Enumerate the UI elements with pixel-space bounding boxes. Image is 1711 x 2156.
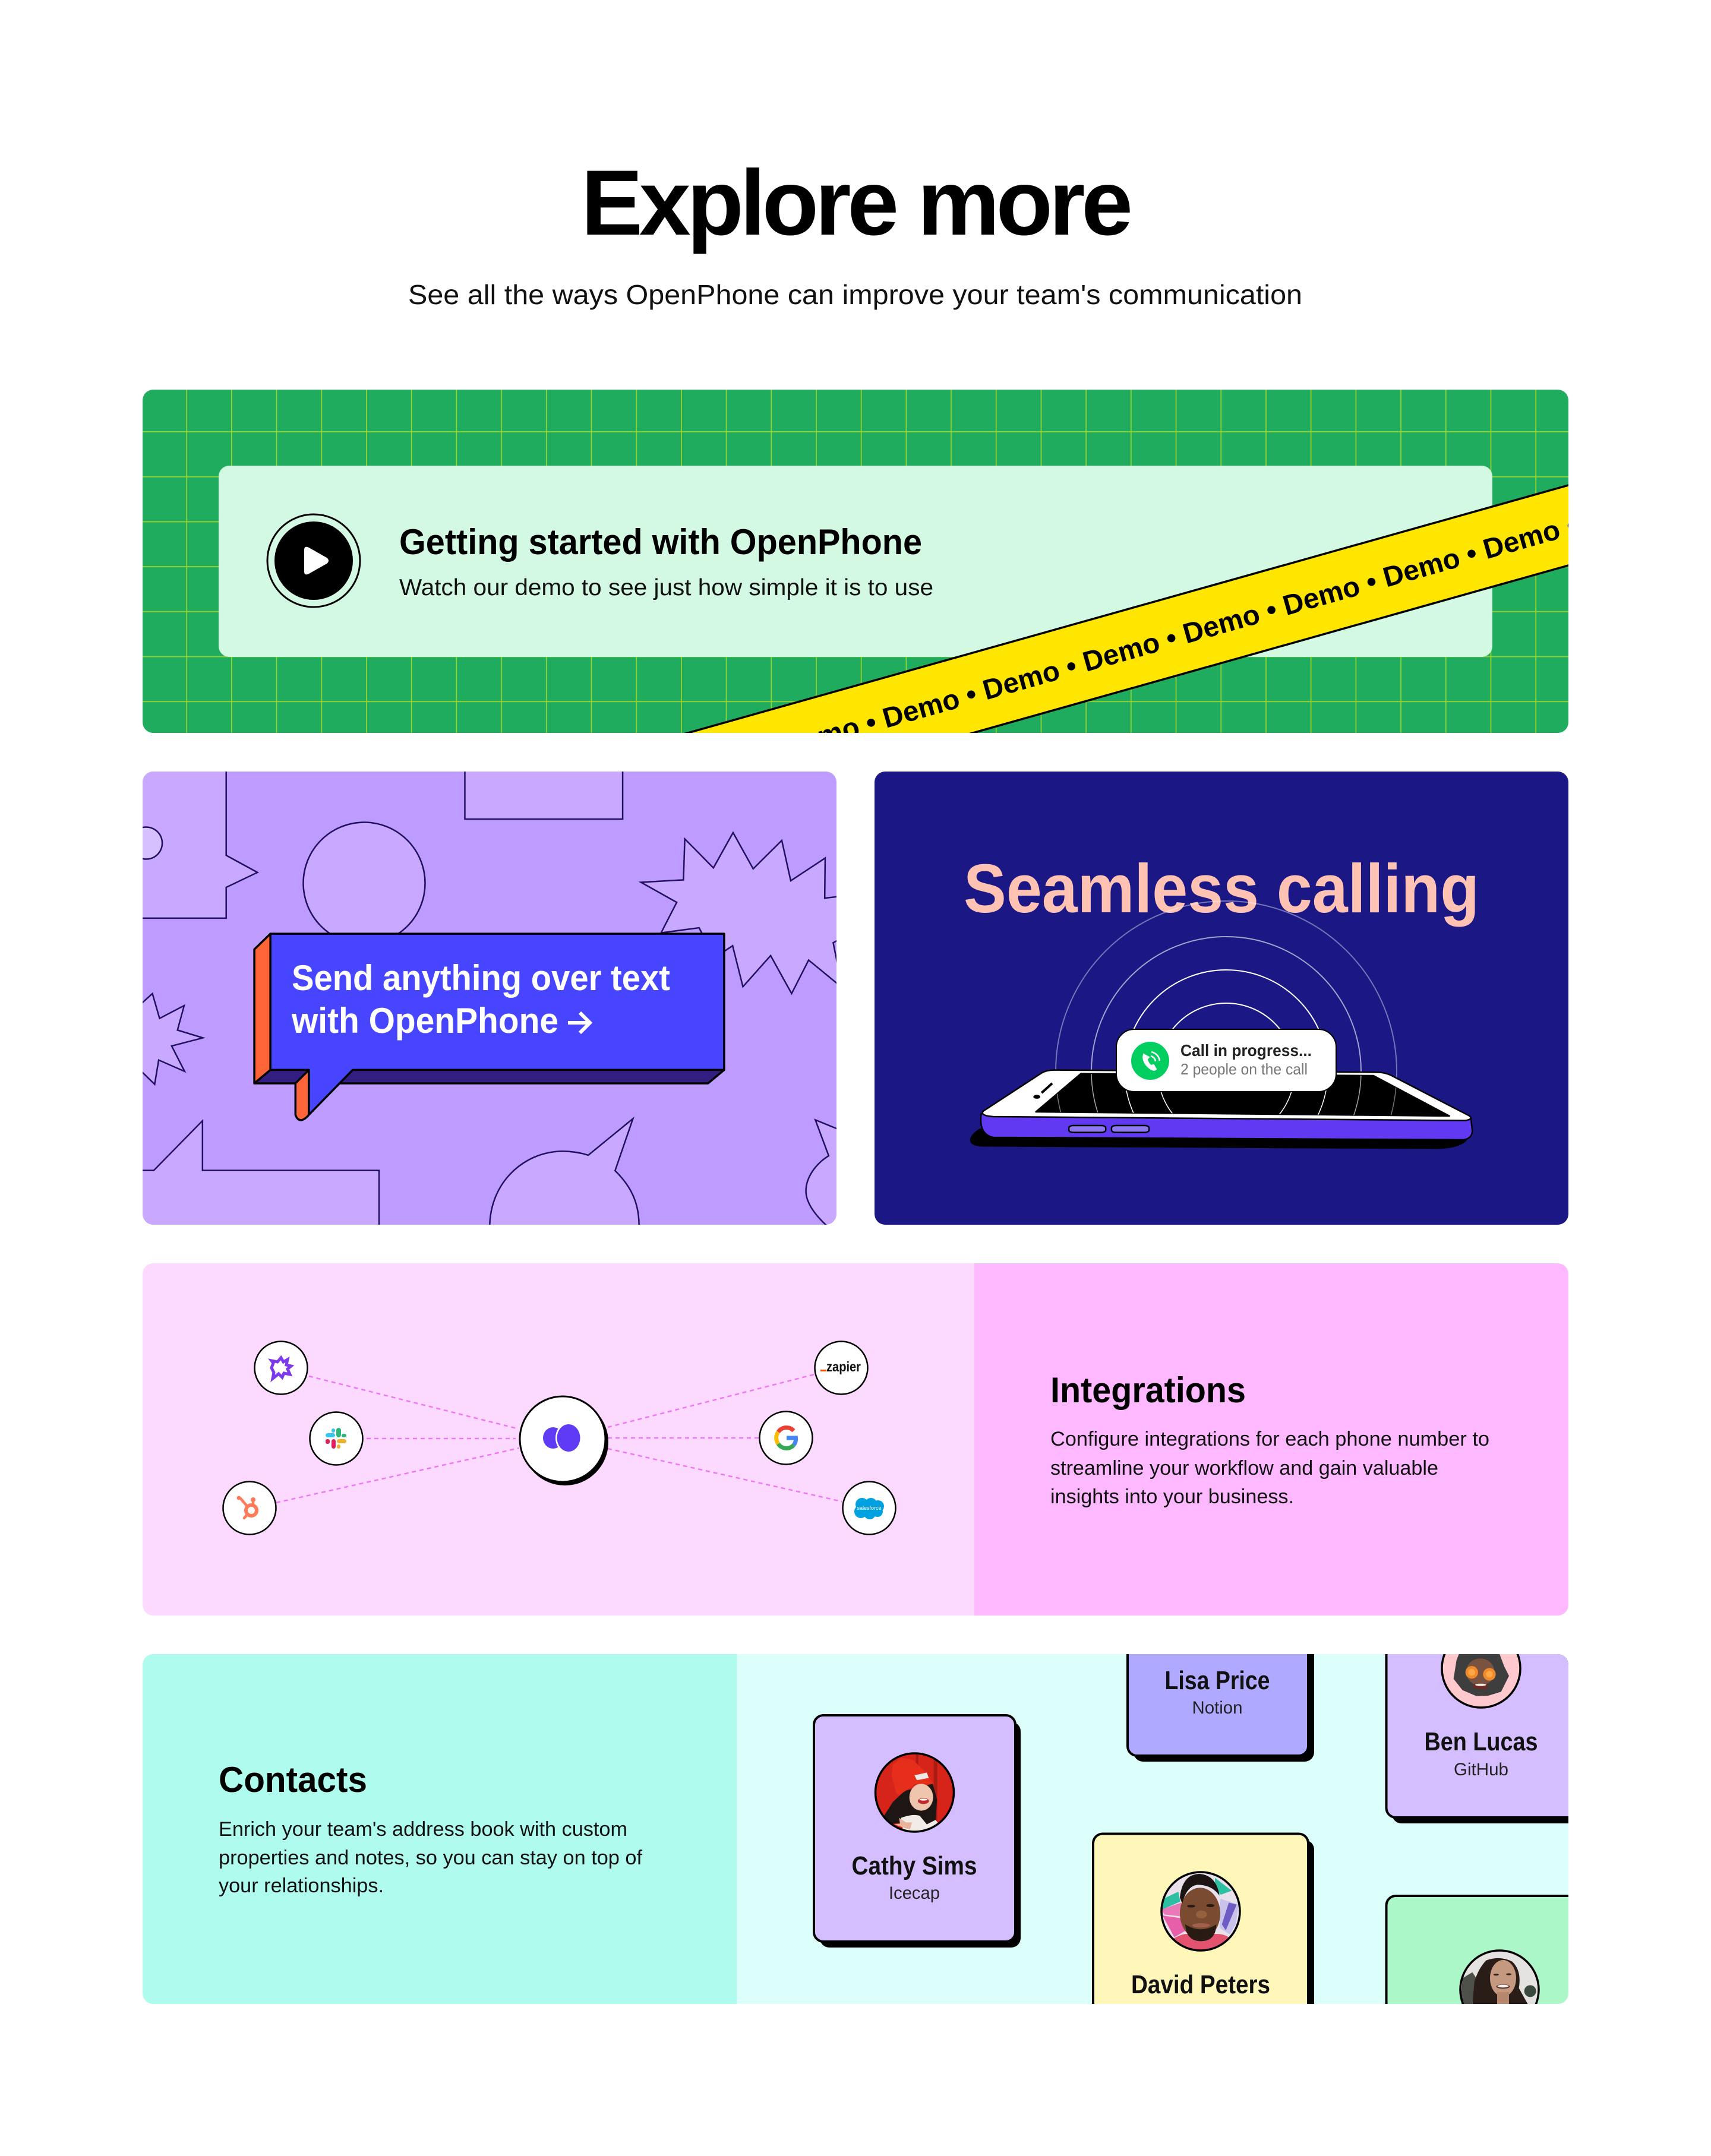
icon: google — [759, 1411, 813, 1465]
company: Notion — [1192, 1698, 1243, 1718]
call notification — [1116, 1029, 1336, 1092]
name: Ben Lucas — [1425, 1727, 1538, 1756]
arcs over screen — [1056, 1074, 1396, 1115]
contact card: Ben Lucas — [1387, 1629, 1594, 1823]
name: Lisa Price — [1164, 1666, 1270, 1695]
title: Explore more — [581, 151, 1133, 255]
contacts description: properties and notes, so you can stay on top of — [219, 1847, 643, 1869]
contact card: David Peters — [1093, 1834, 1314, 2089]
icon: openphone hub — [520, 1396, 608, 1485]
icon: star app — [254, 1341, 308, 1395]
panel: integrations — [143, 1263, 1568, 1616]
panel: send anything over text — [143, 772, 836, 1225]
contacts description — [219, 1818, 643, 1897]
contact card: green — [1387, 1896, 1589, 2074]
icon: salesforce: salesforce — [857, 1505, 882, 1511]
integrations description: insights into your business. — [1050, 1485, 1294, 1508]
company: GitHub — [1454, 1760, 1508, 1779]
card heading: Getting started with OpenPhone — [399, 522, 922, 562]
integrations heading: Integrations — [1050, 1370, 1246, 1410]
card description: Watch our demo to see just how simple it is to use — [399, 575, 933, 600]
demo ribbon: Demo • Demo • Demo • Demo • Demo • Demo • Demo • Demo • Demo • Demo — [679, 486, 1663, 791]
icon: salesforce — [842, 1481, 896, 1535]
icon: zapier — [815, 1341, 867, 1395]
integrations description: Configure integrations for each phone number to — [1050, 1428, 1489, 1450]
contacts description: Enrich your team's address book with custom — [219, 1818, 627, 1841]
avatar: woman — [1459, 1949, 1542, 2032]
icon: arrow — [568, 1013, 590, 1033]
subtitle: See all the ways OpenPhone can improve your team's communication — [408, 279, 1302, 310]
panel: seamless calling — [875, 772, 1568, 1242]
phone illustration — [971, 1070, 1472, 1148]
avatar: David — [1158, 1869, 1242, 1954]
call subtitle: 2 people on the call — [1180, 1060, 1308, 1078]
company: Icecap — [889, 1883, 940, 1903]
panel: contacts — [143, 1629, 1594, 2089]
panel: getting started demo — [143, 390, 1568, 733]
avatar: Cathy — [873, 1752, 956, 1835]
icon: play button — [267, 514, 360, 607]
integrations description — [1050, 1428, 1489, 1508]
icon: zapier: zapier — [826, 1359, 861, 1374]
inner card — [219, 466, 1492, 657]
contact card: Cathy Sims — [814, 1715, 1021, 1948]
contact card: Lisa Price — [1128, 1633, 1314, 1762]
icon: hubspot — [223, 1481, 276, 1535]
call title: Call in progress... — [1180, 1041, 1312, 1060]
heading: Seamless calling — [964, 850, 1479, 927]
connector lines — [276, 1374, 842, 1503]
name: Cathy Sims — [852, 1851, 977, 1880]
bubble text: Send anything over text — [292, 958, 670, 998]
speech bubble: with OpenPhone — [291, 1001, 558, 1041]
name: David Peters — [1131, 1970, 1270, 1999]
icon: slack — [310, 1412, 362, 1465]
speech bubble — [254, 934, 724, 1120]
contacts heading: Contacts — [219, 1760, 367, 1800]
background shapes — [143, 772, 836, 1225]
signal arcs — [1055, 900, 1397, 1077]
avatar: Ben — [1439, 1629, 1524, 1712]
contacts description: your relationships. — [219, 1874, 384, 1897]
icon: green call — [1131, 1042, 1169, 1080]
integrations description: streamline your workflow and gain valuable — [1050, 1457, 1438, 1480]
